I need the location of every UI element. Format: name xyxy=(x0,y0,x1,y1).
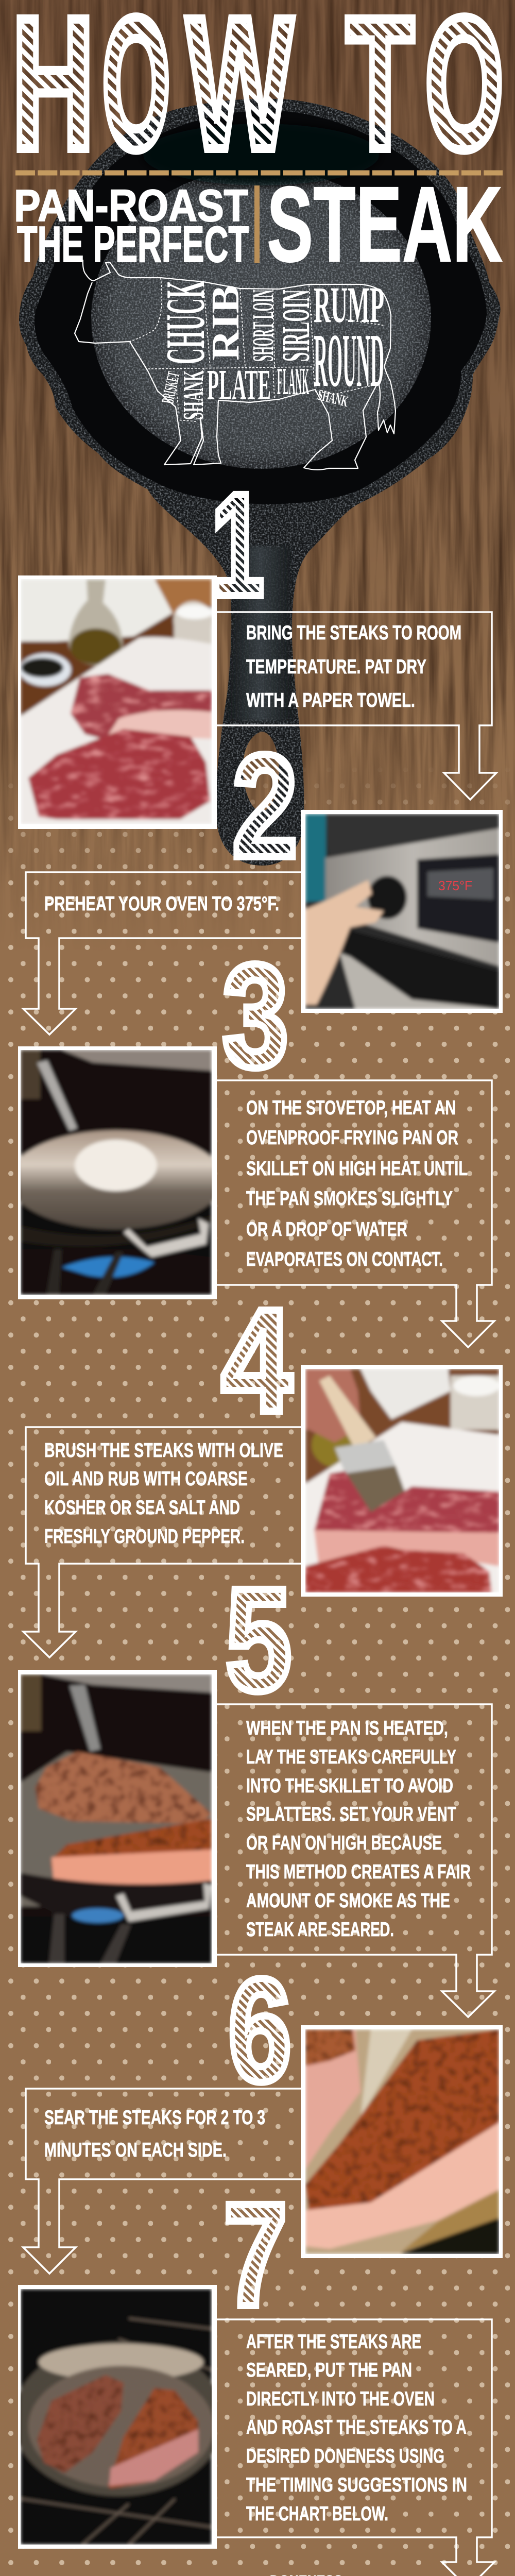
beef cuts cow diagram: SHANK xyxy=(178,370,210,420)
beef cuts cow diagram: FLANK xyxy=(277,361,309,403)
step 6 text box with arrow xyxy=(23,2089,301,2274)
step 5 text box with arrow xyxy=(217,1704,494,2017)
photo: brushing steak with oil xyxy=(301,1365,503,1597)
photo: raw steaks on platter xyxy=(18,575,217,829)
step 5 text box with arrow: STEAK ARE SEARED. xyxy=(246,1919,394,1941)
title divider: dashed gold line xyxy=(15,170,503,175)
photo: oven dial at 375°F: 375°F xyxy=(438,878,472,893)
step number 7: 7 xyxy=(224,2173,287,2337)
beef cuts cow diagram: SIRLOIN xyxy=(274,290,318,362)
step 3 text box with arrow xyxy=(217,1080,494,1347)
photo: heating pan on gas burner xyxy=(9,1046,223,1299)
step 7 text box with arrow: SEARED, PUT THE PAN xyxy=(246,2359,412,2381)
beef cuts cow diagram: SHORT LOIN xyxy=(246,290,280,362)
step 4 text box with arrow: FRESHLY GROUND PEPPER. xyxy=(44,1526,245,1548)
step number 6: 6 xyxy=(228,1948,291,2112)
beef cuts cow diagram: PLATE xyxy=(207,361,271,409)
step 7 text box with arrow: THE CHART BELOW. xyxy=(246,2503,388,2525)
beef cuts cow diagram xyxy=(75,260,396,470)
step 5 text box with arrow: OR FAN ON HIGH BECAUSE xyxy=(246,1832,442,1854)
cast iron skillet xyxy=(19,99,501,866)
step 3 text box with arrow: EVAPORATES ON CONTACT. xyxy=(246,1248,443,1270)
step 7 text box with arrow xyxy=(217,2319,494,2576)
photo: steaks roasting in oven xyxy=(13,2285,224,2549)
step 3 text box with arrow: OR A DROP OF WATER xyxy=(246,1218,407,1241)
step 1 text box with arrow: TEMPERATURE. PAT DRY xyxy=(246,656,426,678)
step 5 text box with arrow: WHEN THE PAN IS HEATED, xyxy=(246,1717,448,1739)
step number 1: 1 xyxy=(211,463,264,627)
title: pan-roast the perfect steak xyxy=(14,165,503,284)
photo: steaks laid in skillet xyxy=(18,1670,217,1967)
step number 5: 5 xyxy=(226,1558,291,1722)
step 2 text box with arrow: PREHEAT YOUR OVEN TO 375°F. xyxy=(44,893,279,915)
step 6 text box with arrow: MINUTES ON EACH SIDE. xyxy=(44,2139,227,2161)
step number 4: 4 xyxy=(221,1279,293,1443)
step number 3: 3 xyxy=(222,934,288,1098)
step 7 text box with arrow: AFTER THE STEAKS ARE xyxy=(246,2331,421,2353)
step 6 text box with arrow: SEAR THE STEAKS FOR 2 TO 3 xyxy=(44,2107,265,2129)
step 7 text box with arrow: DIRECTLY INTO THE OVEN xyxy=(246,2388,435,2410)
title: pan-roast the perfect steak: PAN-ROAST xyxy=(14,181,248,231)
title: pan-roast the perfect steak: THE PERFECT xyxy=(17,216,249,273)
step 1 text box with arrow xyxy=(217,612,496,800)
step 4 text box with arrow: OIL AND RUB WITH COARSE xyxy=(44,1468,248,1490)
step 4 text box with arrow: KOSHER OR SEA SALT AND xyxy=(44,1497,240,1519)
step 2 text box with arrow xyxy=(23,872,301,1035)
beef cuts cow diagram: BRISKET xyxy=(159,370,184,405)
step 4 text box with arrow: BRUSH THE STEAKS WITH OLIVE xyxy=(44,1439,283,1462)
photo: searing steak close-up xyxy=(301,2025,503,2258)
step 4 text box with arrow xyxy=(23,1427,301,1657)
step 7 text box with arrow: DESIRED DONENESS USING xyxy=(246,2445,444,2467)
beef cuts cow diagram: SHANK xyxy=(316,386,350,410)
photo: oven dial at 375°F xyxy=(301,810,503,1013)
beef cuts cow diagram: RUMP xyxy=(314,276,384,333)
title: HOW TO xyxy=(12,0,504,189)
beef cuts cow diagram: RIB xyxy=(204,285,247,361)
beef cuts cow diagram: CHUCK xyxy=(155,281,216,364)
step 1 text box with arrow: WITH A PAPER TOWEL. xyxy=(246,689,415,711)
step number 2: 2 xyxy=(232,724,298,888)
